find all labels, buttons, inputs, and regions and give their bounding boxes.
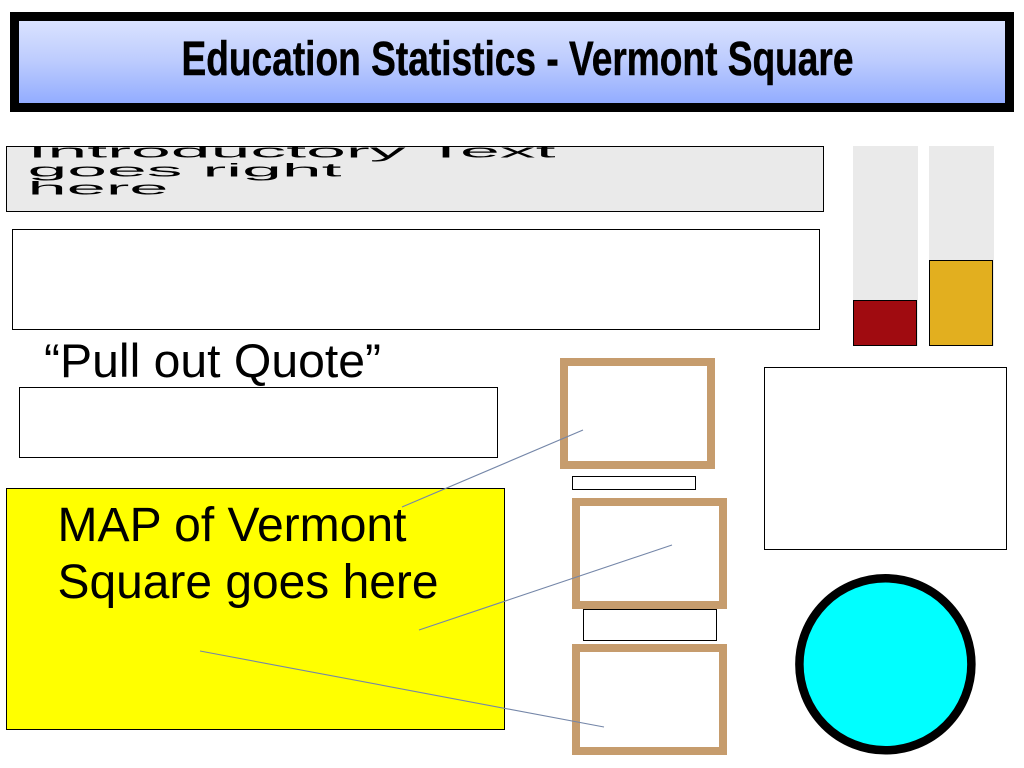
bar: gold [929,146,994,346]
caption box 1 [572,476,696,490]
title banner [14,16,1010,108]
cyan circle [799,578,971,750]
pull quote heading: “Pull out Quote” [44,334,381,387]
introductory text: Introductory Text [28,142,556,162]
photo frame 3 [576,648,723,751]
connector line 1 [402,430,583,507]
pull quote box [20,388,498,458]
map placeholder [6,488,504,730]
introductory text: goes right [28,160,342,180]
connector line 2 [419,545,672,630]
photo frame 2 [576,502,723,605]
caption box 2 [584,610,716,640]
panel: introductory text [6,142,824,212]
connector line 3 [200,651,604,727]
empty side panel [764,368,1006,550]
photo frame 1 [564,362,711,465]
map text: MAP of Vermont [58,499,407,552]
map text [58,499,438,609]
bar chart [853,146,994,346]
introductory text: here [28,178,168,198]
introductory text [30,147,555,194]
map text: Square goes here [58,556,438,609]
bar: red [853,146,918,346]
empty text box [12,230,820,330]
